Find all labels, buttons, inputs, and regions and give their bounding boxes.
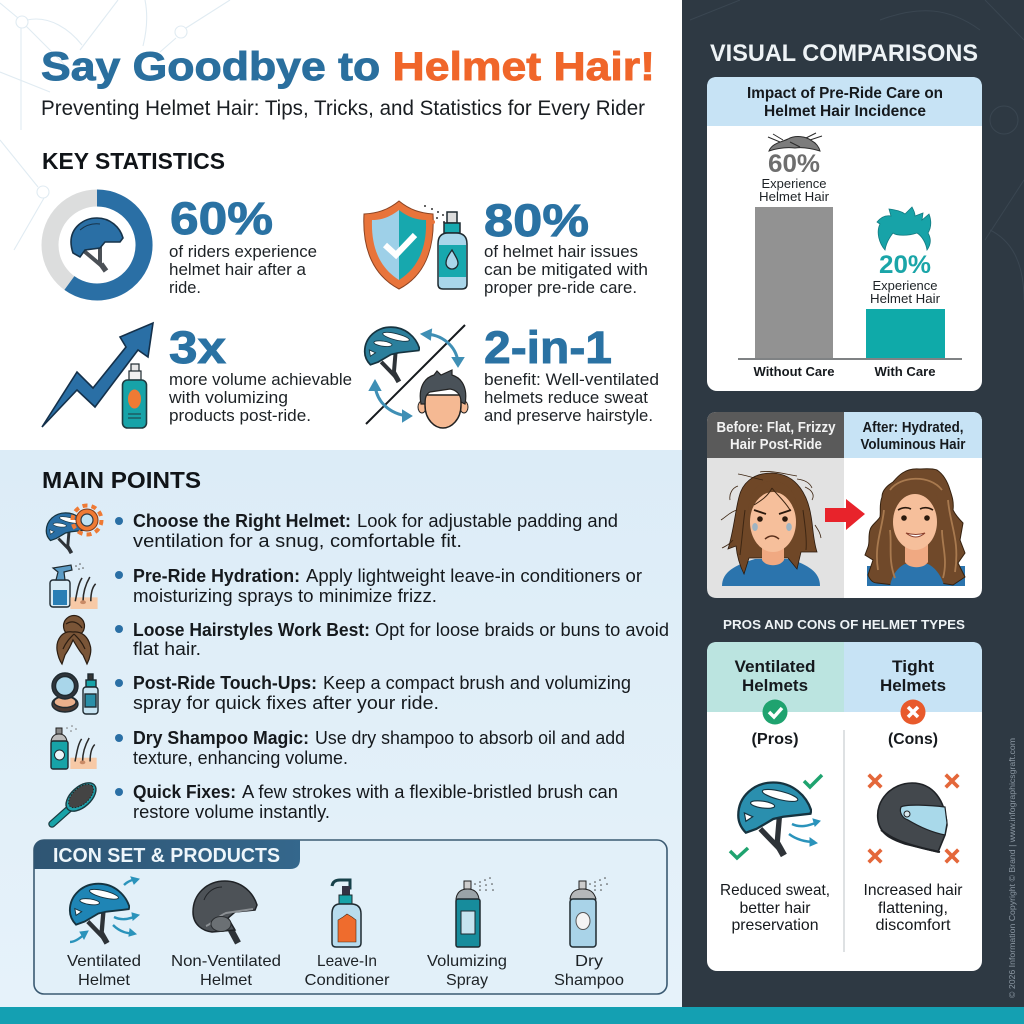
description: proper pre-ride care. <box>484 278 637 297</box>
icon: compact and bottle <box>52 673 98 714</box>
icon: check badge <box>762 700 788 724</box>
label: Conditioner <box>304 972 390 989</box>
subtitle: Preventing Helmet Hair: Tips, Tricks, and Statistics for Every Rider <box>41 97 645 120</box>
icon: ventilated helmet with checks <box>730 775 822 858</box>
point: dry shampoo: Dry Shampoo Magic: <box>133 728 309 748</box>
label: Leave-In <box>317 953 377 970</box>
panel: before and after <box>707 412 982 598</box>
bar: with care: 20% <box>879 251 931 279</box>
panel: main points <box>42 467 669 824</box>
number: 80% <box>484 195 589 246</box>
before heading <box>707 412 844 458</box>
point: loose hairstyles: Loose Hairstyles Work Best: <box>133 620 370 640</box>
bar: with care <box>866 251 945 358</box>
label: Ventilated <box>67 953 141 970</box>
sidebar heading: VISUAL COMPARISONS <box>710 40 978 67</box>
main points background <box>0 450 682 1007</box>
point: pre-ride hydration: moisturizing sprays to minimize frizz. <box>133 586 437 606</box>
icon: shampoo can and hair <box>51 725 97 769</box>
ventilated column header: Helmets <box>742 676 808 695</box>
description: can be mitigated with <box>484 260 648 279</box>
pros text: better hair <box>740 900 811 917</box>
cons text: flattening, <box>878 900 948 917</box>
bar: with care: Experience <box>872 278 938 293</box>
before heading: Before: Flat, Frizzy <box>716 420 836 436</box>
card heading: Helmet Hair Incidence <box>764 103 926 120</box>
bottom teal strip <box>0 1007 1024 1024</box>
pros cons labels: (Cons) <box>888 731 938 748</box>
label: Spray <box>446 972 488 989</box>
label: Shampoo <box>554 972 624 989</box>
panel: key statistics <box>42 148 659 428</box>
panel: icon set and products <box>34 840 667 994</box>
icon: helmet and hair exchange <box>365 325 468 428</box>
vertical copyright: © 2026 Information Copyright © Brand | www.infographicsgraft.com <box>1008 738 1017 998</box>
heading: main points: MAIN POINTS <box>42 467 201 493</box>
number: 60% <box>170 193 273 244</box>
product: volumizing spray <box>427 877 507 989</box>
description: of riders experience <box>169 242 317 261</box>
icon: voluminous teal hair <box>877 207 931 250</box>
bar: with care: Helmet Hair <box>870 291 941 306</box>
after heading: After: Hydrated, <box>862 420 964 436</box>
point: post-ride touch-ups: Keep a compact brush and volumizing <box>323 673 631 693</box>
point: quick fixes: A few strokes with a flexible-bristled brush can <box>242 782 618 802</box>
point: dry shampoo: texture, enhancing volume. <box>133 748 348 768</box>
pros and cons heading: PROS AND CONS OF HELMET TYPES <box>723 617 965 632</box>
tab heading: ICON SET & PRODUCTS <box>53 845 280 867</box>
point: quick fixes: Quick Fixes: <box>133 782 236 802</box>
icon: helmet and gear <box>46 506 102 553</box>
label: Dry <box>575 953 603 970</box>
stat: 80% <box>364 195 648 297</box>
ventilated column header: Ventilated <box>734 657 816 676</box>
point: choose the right helmet: ventilation for a snug, comfortable fit. <box>133 531 462 551</box>
description: helmets reduce sweat <box>484 388 648 407</box>
icon: hair bun <box>57 616 91 664</box>
pros text: Reduced sweat, <box>720 882 830 899</box>
label: Non-Ventilated <box>171 953 281 970</box>
point: choose the right helmet: Look for adjustable padding and <box>357 511 618 531</box>
product: non-ventilated helmet <box>171 881 281 989</box>
point: loose hairstyles <box>57 616 669 664</box>
bar: without care: Experience <box>762 176 826 191</box>
description: with volumizing <box>168 388 288 407</box>
sidebar background <box>682 0 1024 1007</box>
point: dry shampoo: Use dry shampoo to absorb oil and add <box>315 728 625 748</box>
illustration: voluminous hair <box>865 469 965 586</box>
icon: rising arrow and spray <box>42 323 153 428</box>
axis labels: Without Care <box>754 364 834 379</box>
cons text: Increased hair <box>864 882 963 899</box>
icon: spray bottle and hair <box>50 563 98 609</box>
bar: without care <box>755 150 833 358</box>
product: ventilated helmet <box>67 877 141 989</box>
pros cons labels: (Pros) <box>752 731 798 748</box>
stat: 3x <box>42 322 352 428</box>
illustration: flat frizzy hair <box>721 471 821 586</box>
stat: 2-in-1 <box>365 322 659 428</box>
heading: key statistics: KEY STATISTICS <box>42 148 225 174</box>
card heading <box>707 77 982 126</box>
point: pre-ride hydration <box>50 563 642 609</box>
bar: without care: Helmet Hair <box>759 189 830 204</box>
description: products post-ride. <box>169 406 311 425</box>
after heading: Voluminous Hair <box>860 437 966 453</box>
icon: shield and spray <box>364 201 467 289</box>
label: Volumizing <box>427 953 507 970</box>
point: dry shampoo <box>51 725 625 769</box>
label: Helmet <box>78 972 131 989</box>
tight column header: Helmets <box>880 676 946 695</box>
arrow <box>825 499 865 530</box>
panel: bar chart card <box>707 77 982 391</box>
point: choose the right helmet <box>46 506 618 553</box>
tab heading <box>34 840 300 869</box>
card heading: Impact of Pre-Ride Care on <box>747 85 943 102</box>
donut chart <box>50 198 144 292</box>
point: loose hairstyles: Opt for loose braids or buns to avoid <box>375 620 669 640</box>
icon: closed helmet with crosses <box>869 775 958 862</box>
point: pre-ride hydration: Pre-Ride Hydration: <box>133 566 300 586</box>
point: post-ride touch-ups: spray for quick fixes after your ride. <box>133 693 439 713</box>
before heading: Hair Post-Ride <box>730 437 822 453</box>
axis labels: With Care <box>874 364 936 379</box>
number: 2-in-1 <box>484 322 612 373</box>
description: benefit: Well-ventilated <box>484 370 659 389</box>
description: ride. <box>169 278 201 297</box>
product: leave-in conditioner <box>304 880 390 989</box>
stat: 60% <box>50 193 317 297</box>
description: and preserve hairstyle. <box>484 406 653 425</box>
after heading <box>844 412 982 458</box>
point: post-ride touch-ups: Post-Ride Touch-Ups: <box>133 673 317 693</box>
label: Helmet <box>200 972 253 989</box>
point: quick fixes <box>52 778 618 824</box>
cons text: discomfort <box>876 917 951 934</box>
point: quick fixes: restore volume instantly. <box>133 802 330 822</box>
point: post-ride touch-ups <box>52 673 631 714</box>
tight column header: Tight <box>892 657 934 676</box>
point: pre-ride hydration: Apply lightweight leave-in conditioners or <box>306 566 642 586</box>
description: more volume achievable <box>169 370 352 389</box>
description: of helmet hair issues <box>484 242 638 261</box>
point: loose hairstyles: flat hair. <box>133 639 201 659</box>
pros text: preservation <box>732 917 818 934</box>
number: 3x <box>169 322 226 373</box>
point: choose the right helmet: Choose the Right Helmet: <box>133 511 351 531</box>
panel: pros and cons <box>707 642 982 971</box>
title: Say Goodbye to Helmet Hair! <box>41 45 655 89</box>
product: dry shampoo <box>554 877 624 989</box>
description: helmet hair after a <box>169 260 307 279</box>
icon: flat hair <box>768 133 822 151</box>
bar: without care: 60% <box>768 150 820 178</box>
ventilated column header <box>707 642 844 712</box>
icon: cross badge <box>900 700 926 724</box>
tight column header <box>844 642 982 712</box>
icon: brush <box>52 778 101 824</box>
